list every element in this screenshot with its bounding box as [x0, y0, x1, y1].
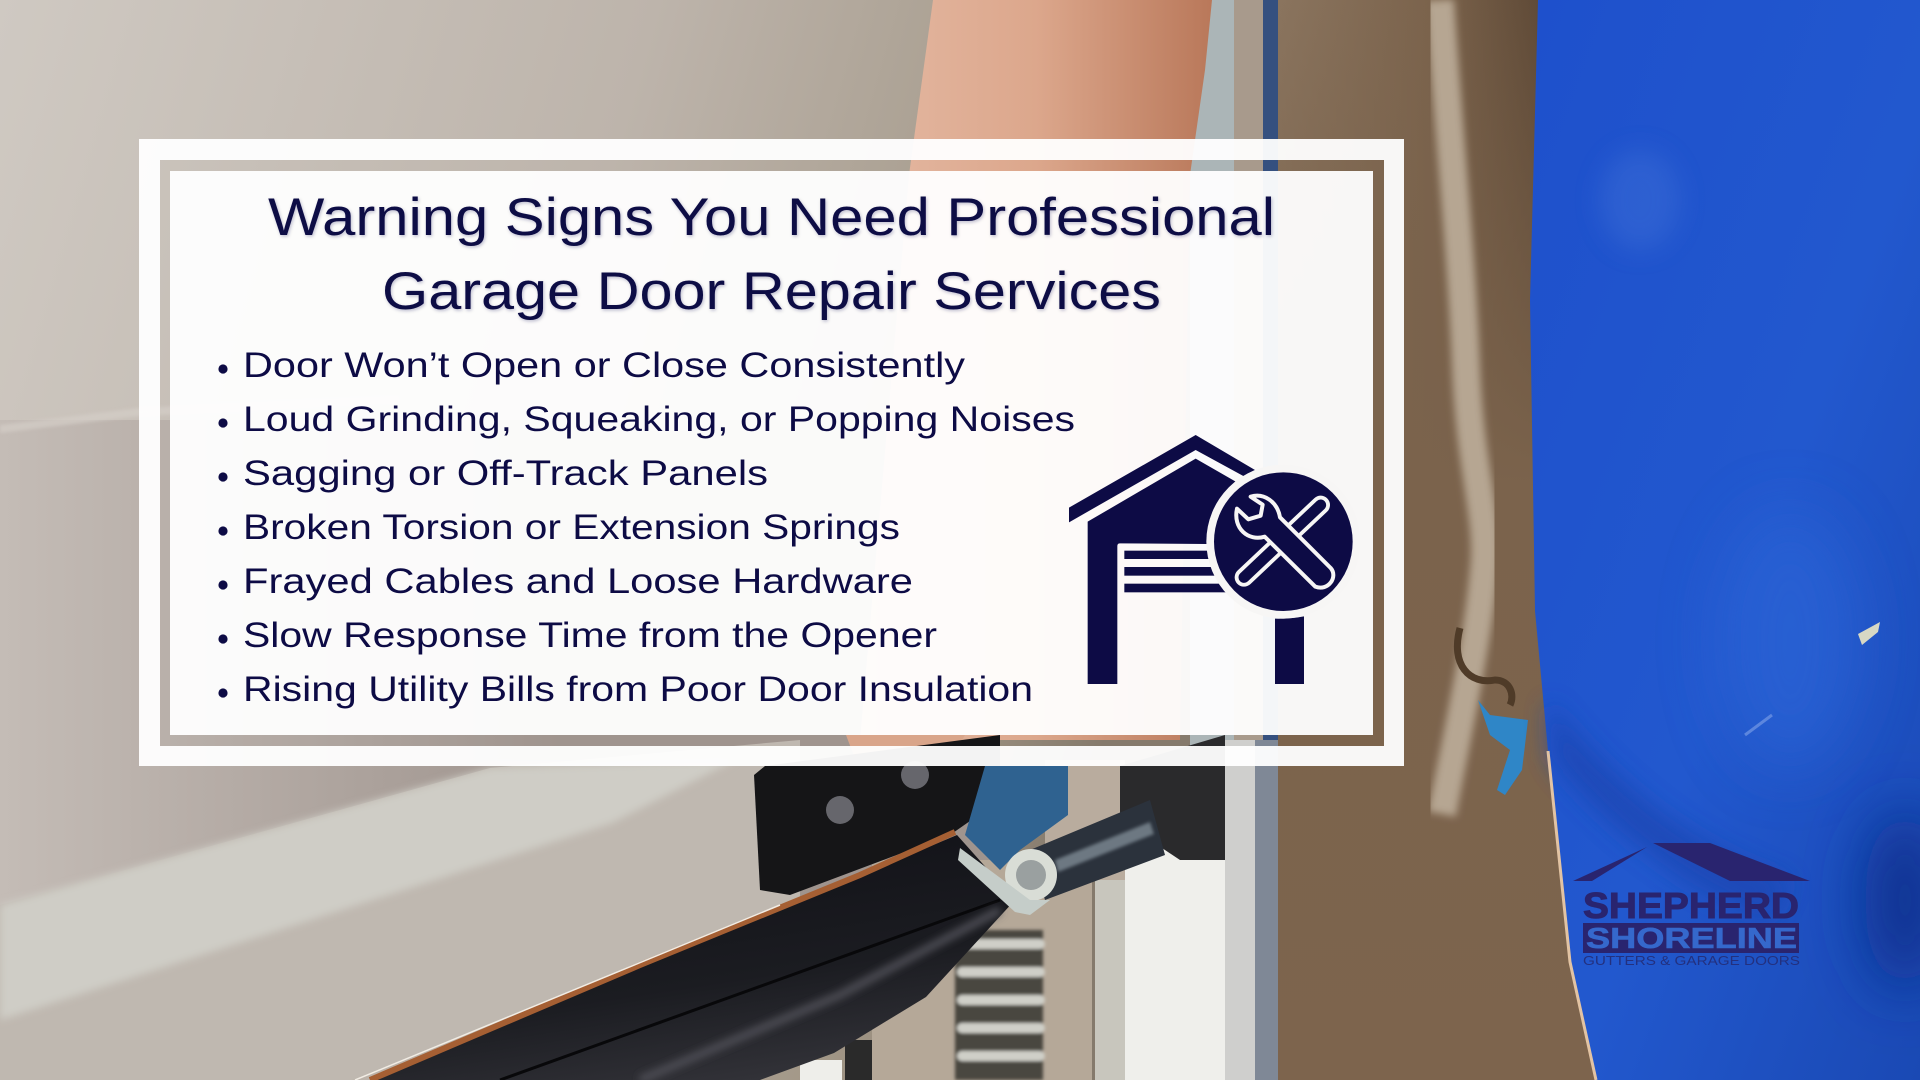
hand on bracket: [846, 735, 965, 776]
blue work cloth: [1530, 0, 1920, 1080]
title: [268, 188, 1275, 321]
house body: [1088, 459, 1243, 684]
pale hanging cable: [1440, 0, 1485, 814]
brown wall: [1278, 0, 1618, 1080]
icon: garage with wrench and screwdriver: [1069, 435, 1360, 684]
ring gap: [1206, 465, 1360, 619]
door slats: [1124, 551, 1231, 592]
logo: Shepherd Shoreline: [1573, 843, 1810, 968]
coil end: [1120, 735, 1225, 860]
hook and blue tag: [1457, 628, 1528, 795]
tool circle: [1214, 472, 1353, 611]
inner white card: [170, 171, 1373, 735]
outer white frame: [139, 139, 1404, 766]
roller shaft: [958, 800, 1165, 915]
logo name: Shepherd: SHEPHERD: [1583, 885, 1799, 926]
torsion bar with copper strip: [355, 832, 1015, 1080]
lower door hardware backdrop: [800, 760, 1225, 1080]
house roof: [1069, 435, 1255, 522]
black bracket: [754, 735, 1000, 895]
wrench: [1236, 496, 1333, 588]
item: utility bills: Rising Utility Bills from Poor Door Insulation: [243, 670, 1033, 709]
logo name: Shoreline band: SHORELINE: [1586, 923, 1797, 955]
title: Garage Door Repair Services: [382, 262, 1161, 321]
item: slow response: Slow Response Time from the Opener: [243, 616, 937, 655]
arm: [860, 0, 1212, 740]
item: broken springs: Broken Torsion or Extension Springs: [243, 508, 900, 547]
logo roof: [1573, 843, 1810, 881]
logo tagline: GUTTERS & GARAGE DOORS: [1583, 954, 1800, 968]
blue hinge: [965, 766, 1068, 870]
white double frame panel: [139, 139, 1404, 766]
item: frayed cables: Frayed Cables and Loose Hardware: [243, 562, 913, 601]
title: Warning Signs You Need Professional: [268, 188, 1275, 247]
item: noises: Loud Grinding, Squeaking, or Popping Noises: [243, 400, 1075, 439]
item: sagging panels: Sagging or Off-Track Panels: [243, 454, 768, 493]
right pillar: [1275, 616, 1304, 684]
bullet list: [218, 346, 1075, 709]
item: door won't open: Door Won’t Open or Close Consistently: [243, 346, 966, 385]
spring: [955, 930, 1043, 1080]
screwdriver: [1244, 505, 1321, 577]
door frame metal strips: [1190, 0, 1280, 1080]
garage door wall: [0, 0, 1240, 1080]
